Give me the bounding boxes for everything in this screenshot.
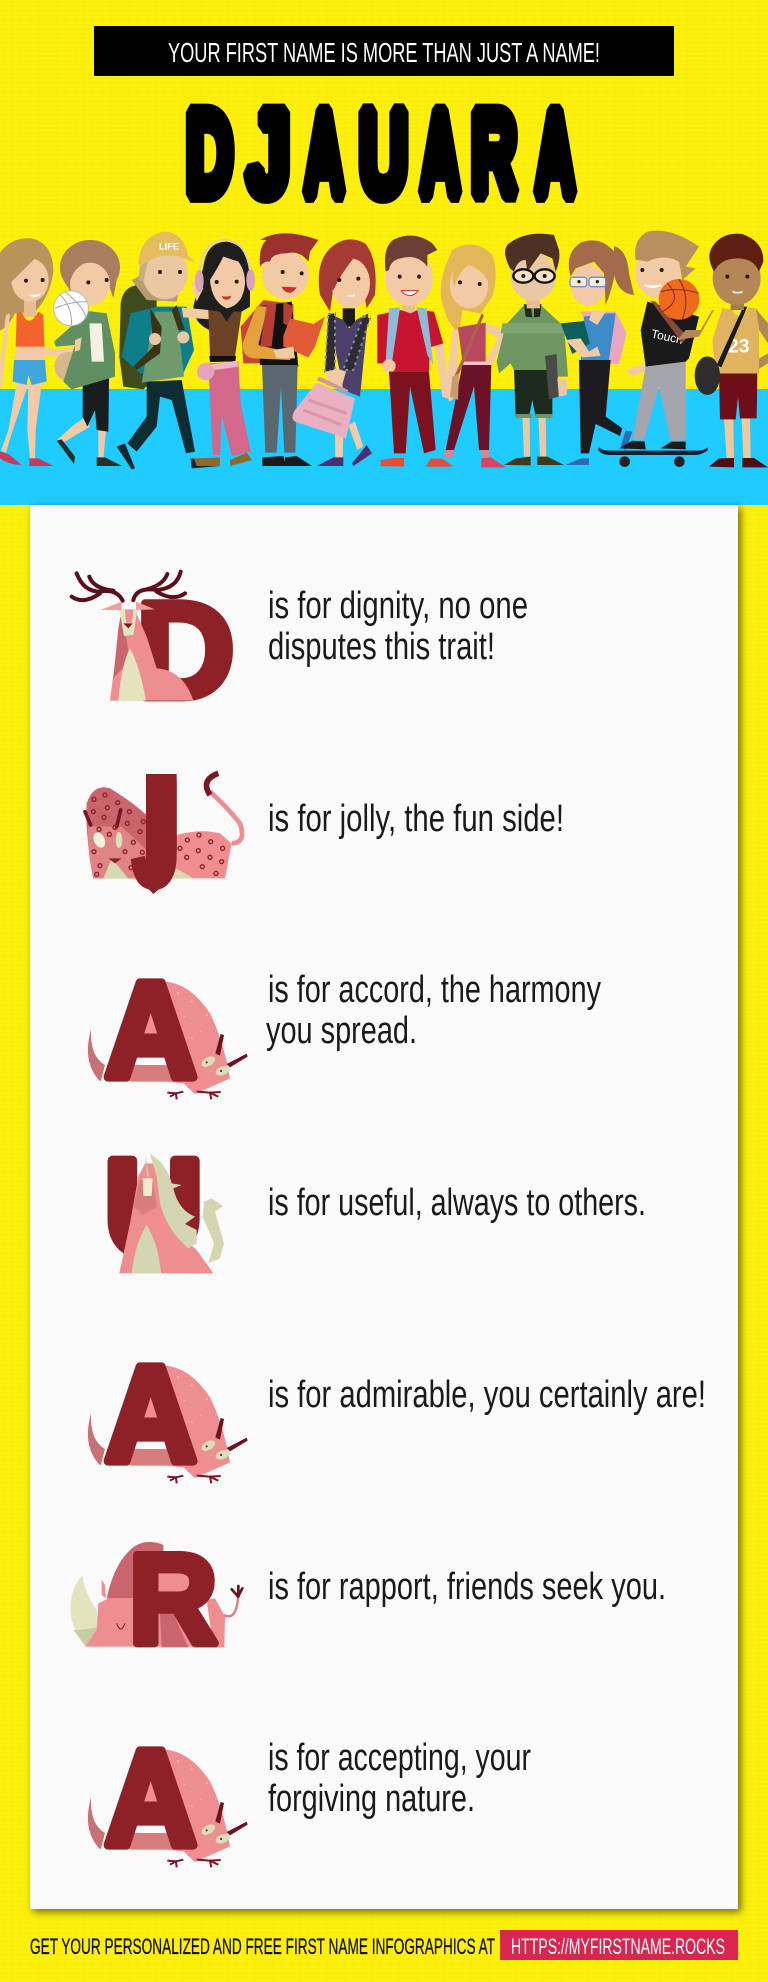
person: boy with tank top and bag bbox=[677, 234, 768, 467]
text: J line: is for jolly, the fun side! bbox=[268, 798, 564, 840]
text: first A line bbox=[266, 969, 601, 1052]
icon: letter A armadillo second bbox=[88, 1338, 248, 1490]
person: boy in red shirt bbox=[377, 235, 453, 467]
text: U line: is for useful, always to others. bbox=[268, 1182, 646, 1224]
person: blonde girl bbox=[441, 244, 507, 467]
text: third A line: forgiving nature. bbox=[268, 1778, 475, 1820]
title: A bbox=[420, 87, 460, 221]
person: girl with pink bag bbox=[292, 239, 376, 466]
person: girl in orange top bbox=[0, 238, 82, 466]
person: hiker with cap and backpack bbox=[117, 232, 220, 469]
icon: letter R rhino bbox=[70, 1527, 242, 1671]
panel: white card bbox=[30, 505, 738, 1909]
person: girl with volleyball bbox=[54, 240, 122, 466]
icon: letter U unicorn: U bbox=[104, 1131, 203, 1284]
text: first A line: you spread. bbox=[266, 1010, 417, 1052]
person: girl with tablet and ponytail bbox=[561, 240, 634, 465]
icon: letter D deer: D bbox=[136, 573, 235, 726]
title: J bbox=[247, 87, 290, 221]
icon: letter R rhino: R bbox=[129, 1527, 218, 1671]
person: boy with open book bbox=[241, 233, 325, 466]
person: boy with tank top and bag: 23 bbox=[728, 337, 750, 358]
person: boy with glasses bbox=[497, 234, 568, 465]
icon: letter A armadillo third bbox=[88, 1722, 248, 1874]
text: D line: disputes this trait! bbox=[268, 626, 495, 668]
icon: letter A armadillo first bbox=[88, 954, 248, 1106]
person: skater with basketball: Touch bbox=[650, 327, 684, 347]
title: A bbox=[304, 87, 344, 221]
title: U bbox=[359, 87, 408, 221]
floor band bbox=[0, 389, 768, 505]
text: D line: is for dignity, no one bbox=[268, 585, 528, 627]
text: third A line bbox=[268, 1737, 531, 1820]
illustration: group of people right bbox=[377, 231, 768, 467]
text: D line bbox=[268, 585, 528, 668]
title: A bbox=[535, 87, 575, 221]
illustration: group of people left bbox=[0, 232, 376, 469]
person: skater with basketball bbox=[598, 231, 708, 467]
icon: letter J leopard: J bbox=[129, 747, 183, 922]
icon: letter D deer bbox=[72, 572, 235, 726]
header banner bbox=[94, 26, 674, 76]
person: girl with pink headphones bbox=[182, 239, 255, 466]
person: hiker with cap and backpack: LIFE bbox=[159, 241, 179, 251]
title bbox=[186, 87, 575, 221]
text: first A line: is for accord, the harmony bbox=[268, 969, 601, 1011]
icon: letter J leopard bbox=[85, 747, 242, 922]
title: R bbox=[471, 87, 517, 221]
text: third A line: is for accepting, your bbox=[268, 1737, 531, 1779]
title: D bbox=[186, 87, 233, 221]
footer call to action: GET YOUR PERSONALIZED AND FREE FIRST NAME INFOGRAPHICS AT bbox=[30, 1934, 495, 1959]
